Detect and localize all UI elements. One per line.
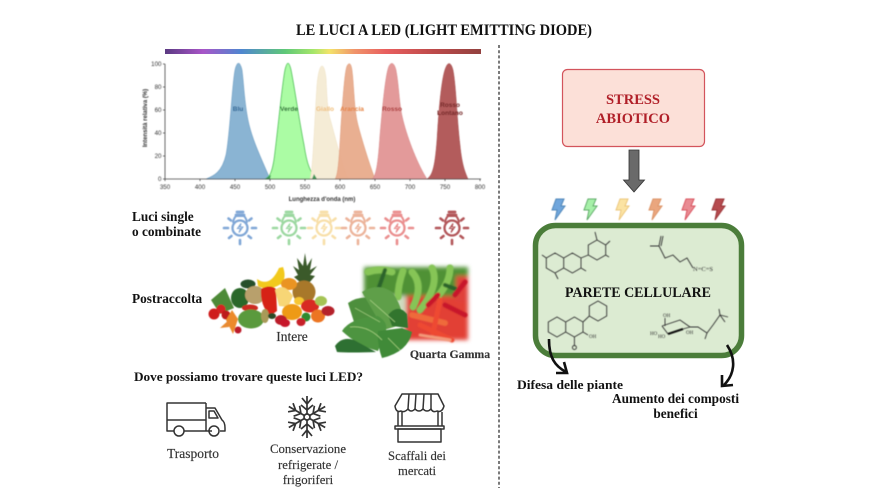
molecule: bottom right: OH	[686, 331, 694, 336]
y axis tick labels: 60	[155, 107, 162, 114]
image: pile of whole fruit and vegetables	[208, 253, 334, 334]
arrow: stress to cell	[624, 150, 644, 192]
curve: Blu	[206, 63, 270, 179]
yellow fruit	[275, 287, 293, 307]
box: stress abiotico	[562, 70, 704, 146]
pineapple body	[292, 280, 316, 304]
caption: Intere: Intere	[276, 329, 308, 344]
caption: Trasporto: Trasporto	[167, 446, 219, 461]
icon: market stall	[395, 394, 444, 442]
panel divider	[498, 45, 500, 488]
molecule: top right	[650, 236, 713, 273]
heading: Dove possiamo trovare queste luci LED?: Dove possiamo trovare queste luci LED?	[134, 370, 363, 384]
panel: right column	[517, 70, 742, 421]
box: stress abiotico: STRESS	[606, 92, 660, 108]
icon: far red bulb	[436, 212, 468, 244]
red pepper	[261, 286, 277, 316]
y axis tick labels	[151, 61, 162, 183]
curve labels: Rosso	[382, 106, 402, 113]
y axis tick labels: 100	[151, 61, 162, 68]
broccoli	[240, 280, 256, 288]
icons: coloured lightning bolts	[552, 199, 725, 220]
chart: LED emission spectra	[143, 61, 486, 203]
icon: blue bolt	[552, 199, 565, 220]
x axis tick labels: 500	[265, 184, 276, 191]
x axis tick labels: 800	[475, 184, 486, 191]
x axis tick labels: 450	[230, 184, 241, 191]
molecule: bottom left: OH	[589, 335, 597, 340]
image: fresh-cut vegetables	[335, 267, 468, 358]
pineapple crown	[293, 253, 317, 283]
icon: green bulb	[273, 212, 305, 244]
y axis tick labels: 20	[155, 153, 162, 160]
heading: PARETE CELLULARE: PARETE CELLULARE	[565, 285, 711, 301]
icon: blue bulb	[224, 212, 256, 244]
kiwi	[245, 286, 265, 304]
molecule: bottom right: HO	[658, 335, 666, 340]
curve labels: Verde	[280, 106, 298, 113]
icon: red bulb	[381, 212, 413, 244]
caption: Conservazione refrigerate / frigoriferi: Conservazione	[270, 442, 346, 456]
carrots	[226, 310, 238, 334]
x axis tick labels: 350	[160, 184, 171, 191]
bananas	[257, 267, 285, 289]
icon: orange bulb	[342, 212, 374, 244]
y axis title: Intensità relativa (%)	[143, 89, 149, 147]
icon: dark red bolt	[712, 199, 725, 220]
icon: yellow bolt	[616, 199, 629, 220]
caption: Quarta Gamma: Quarta Gamma	[410, 347, 490, 361]
lettuce	[242, 304, 258, 312]
caption: Aumento dei composti benefici: benefici	[653, 406, 698, 421]
cell wall	[536, 226, 742, 356]
x axis tick labels	[160, 184, 486, 191]
curve labels: Arancia	[340, 106, 364, 113]
label: Postraccolta: Postraccolta	[132, 291, 202, 306]
curve: Arancia	[335, 64, 375, 179]
caption: Aumento dei composti benefici: Aumento dei composti	[612, 391, 739, 406]
icon: snowflake	[286, 396, 328, 438]
curve: Rosso	[372, 63, 427, 179]
x axis title: Lunghezza d'onda (nm)	[289, 197, 355, 203]
caption: Difesa delle piante: Difesa delle piante	[517, 378, 623, 392]
caption: Scaffali dei mercati: mercati	[398, 464, 436, 478]
icons: coloured LED bulbs	[224, 212, 468, 244]
label: Luci single o combinate: o combinate	[132, 224, 201, 239]
y axis tick labels: 40	[155, 130, 162, 137]
panel: left column	[132, 49, 490, 487]
molecule: top left	[542, 232, 610, 279]
berries	[275, 315, 287, 325]
spinach leaves	[348, 298, 392, 332]
icon: red bolt	[682, 199, 695, 220]
arrow: to Difesa delle piante	[549, 339, 567, 373]
x axis tick labels: 550	[300, 184, 311, 191]
curve labels: Blu	[233, 106, 243, 113]
y axis tick labels: 80	[155, 84, 162, 91]
curve: Verde	[265, 63, 317, 179]
molecule: bottom left	[548, 301, 607, 350]
box: stress abiotico: ABIOTICO	[596, 111, 670, 127]
curve: Rosso Lontano	[427, 64, 468, 179]
caption: Conservazione refrigerate / frigoriferi: frigoriferi	[283, 473, 334, 487]
icon: truck	[167, 403, 225, 436]
curve labels: Lontano	[437, 110, 463, 117]
icon: green bolt	[584, 199, 597, 220]
icon: yellow bulb	[308, 212, 340, 244]
curve: Giallo	[310, 66, 348, 179]
icon: orange bolt	[649, 199, 662, 220]
caption: Scaffali dei mercati: Scaffali dei	[388, 449, 446, 463]
x axis tick labels: 700	[405, 184, 416, 191]
x axis tick labels: 400	[195, 184, 206, 191]
molecule: top right: N=C=S	[693, 266, 713, 273]
curve labels: Giallo	[316, 106, 334, 113]
curve labels	[233, 102, 463, 117]
molecule: bottom right	[650, 309, 728, 340]
molecule: bottom right: OH	[663, 314, 671, 319]
tomatoes	[208, 308, 220, 320]
molecule: bottom right: HO	[650, 332, 658, 337]
arrow: to Aumento dei composti benefici	[722, 345, 733, 386]
label: Luci single o combinate: Luci single	[132, 209, 194, 224]
y axis tick labels: 0	[158, 176, 162, 183]
x axis tick labels: 600	[335, 184, 346, 191]
x axis tick labels: 650	[370, 184, 381, 191]
curve overlaps	[265, 174, 317, 179]
title: LE LUCI A LED (LIGHT EMITTING DIODE)	[296, 22, 592, 39]
tomato and apple	[301, 300, 319, 312]
x axis tick labels: 750	[440, 184, 451, 191]
axes	[163, 64, 481, 181]
curve labels: Rosso	[440, 102, 460, 109]
caption: Conservazione refrigerate / frigoriferi: refrigerate /	[278, 458, 338, 472]
colour spectrum bar	[165, 49, 481, 54]
